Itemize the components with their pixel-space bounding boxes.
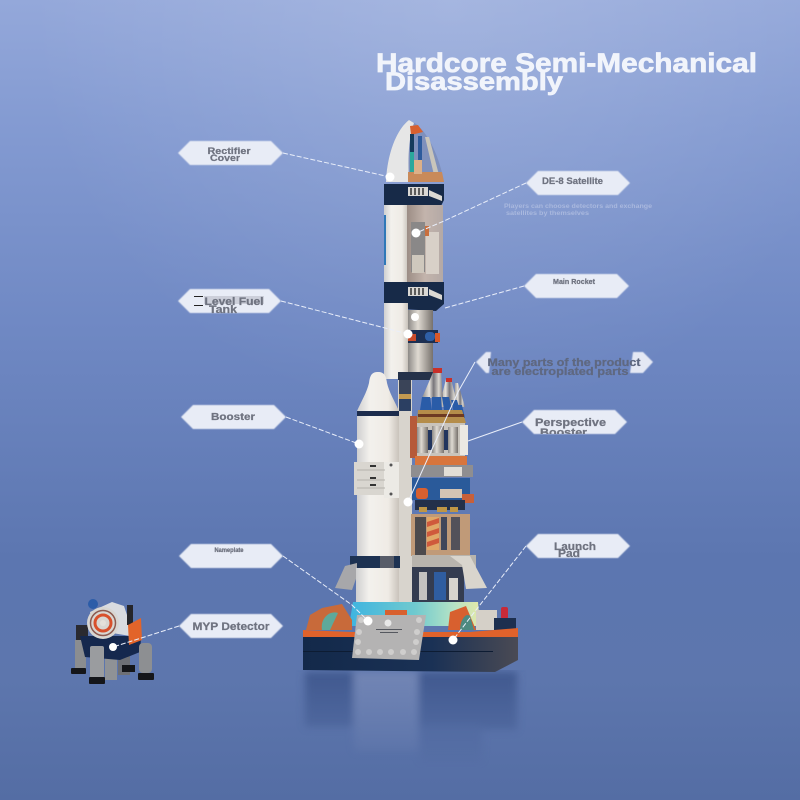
cones — [454, 383, 465, 407]
label: electroplated parts: Many parts of the product — [488, 357, 641, 369]
label: Level Fuel Tank — [178, 289, 281, 316]
title — [376, 48, 757, 96]
label: Launch Pad: Pad — [558, 548, 580, 560]
leader line: main rocket — [445, 286, 524, 308]
leader line: MYP detector — [113, 626, 179, 647]
leader line: nameplate — [283, 556, 368, 621]
nose fairing — [386, 120, 444, 182]
side booster — [335, 372, 400, 602]
text: satellite note: satellites by themselves — [506, 211, 590, 217]
teal platform — [349, 602, 480, 626]
label: Main Rocket — [524, 274, 629, 298]
gold ring — [417, 410, 466, 423]
label: DE-8 Satellite: DE-8 Satellite — [542, 176, 603, 186]
side details — [306, 604, 352, 630]
label: MYP Detector: MYP Detector — [192, 621, 270, 633]
label: Perspective Booster — [522, 410, 627, 439]
label: DE-8 Satellite — [526, 171, 630, 195]
satellite bay — [384, 205, 408, 283]
label: MYP Detector — [179, 614, 283, 638]
leader line: rectifier cover — [283, 153, 390, 177]
leader line: electroplated parts — [408, 362, 475, 502]
label: electroplated parts — [476, 352, 653, 378]
text: satellite note — [504, 204, 653, 217]
icon: MYP detector robot — [71, 599, 154, 684]
navy body — [303, 637, 518, 672]
rocket — [335, 120, 487, 602]
label: Perspective Booster: Perspective — [535, 417, 606, 429]
text: satellite note: Players can choose detectors and exchange — [504, 204, 653, 210]
launch pad base — [303, 602, 518, 672]
lower dark ring — [384, 282, 444, 311]
label: electroplated parts: are electroplated parts — [492, 366, 628, 378]
label: Level Fuel Tank: Tank — [209, 304, 238, 316]
label: Perspective Booster: Booster — [540, 427, 588, 439]
label: Booster: Booster — [211, 412, 255, 423]
label: Rectifier Cover — [178, 141, 283, 165]
lower stage — [384, 303, 408, 379]
label: Rectifier Cover: Rectifier — [208, 146, 251, 157]
title: Hardcore Semi-Mechanical — [376, 48, 757, 78]
leader line: booster — [286, 417, 359, 444]
label: Nameplate — [179, 544, 283, 568]
left fin — [335, 563, 357, 590]
leader line: level fuel tank — [281, 301, 408, 334]
label: Level Fuel Tank: Level Fuel — [204, 296, 264, 308]
leader line: launch pad — [453, 546, 526, 640]
label: Rectifier Cover: Cover — [210, 153, 240, 164]
label: Main Rocket: Main Rocket — [553, 279, 596, 286]
orange deck — [303, 628, 518, 637]
label: Launch Pad — [526, 534, 630, 560]
reflection of launch base — [302, 670, 520, 738]
perspective booster — [410, 368, 487, 602]
leader line: perspective booster — [468, 422, 522, 441]
label: Nameplate: Nameplate — [214, 548, 244, 554]
upper dark ring — [384, 184, 444, 208]
nameplate — [352, 615, 426, 660]
label: Launch Pad: Launch — [554, 541, 596, 553]
label: Booster — [181, 405, 286, 429]
main rocket upper stage — [384, 120, 444, 602]
leader line: DE-8 satellite — [416, 183, 526, 233]
detector disc — [87, 607, 119, 639]
title: Disassembly — [385, 68, 563, 96]
marker dots — [109, 172, 458, 651]
right fin — [450, 556, 487, 589]
